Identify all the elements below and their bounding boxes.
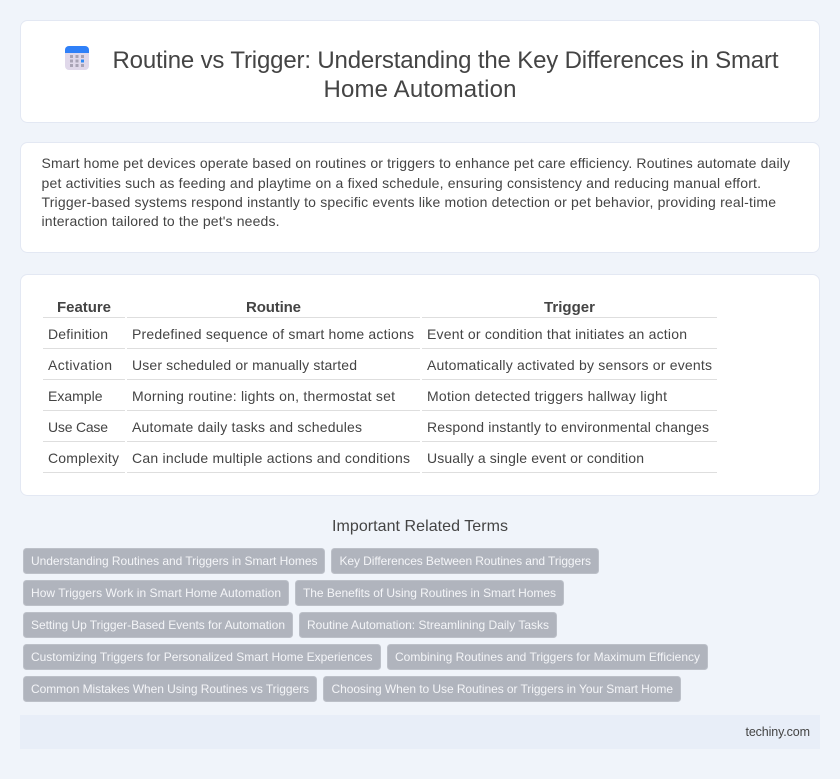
- chip: benefits of routines: [296, 580, 564, 606]
- chip: how triggers work: How Triggers Work in Smart Home Automation: [31, 586, 281, 600]
- chip: common mistakes: Common Mistakes When Using Routines vs Triggers: [31, 682, 309, 696]
- chip: combining routines and triggers: [388, 644, 708, 670]
- chip: understanding routines and triggers: Understanding Routines and Triggers in Smart Homes: [31, 554, 318, 568]
- title: Home Automation: [324, 76, 516, 103]
- table row: complexity: Complexity: [48, 450, 119, 466]
- table row: complexity: Usually a single event or condition: [427, 450, 644, 466]
- table row: use case: Use Case: [48, 419, 108, 435]
- table row: activation: Activation: [48, 357, 112, 373]
- table row: use case: [48, 419, 709, 435]
- text block: summary: Smart home pet devices operate based on routines or triggers to enhance pet care efficiency. Routines automate daily: [42, 155, 790, 171]
- table row: example: [48, 388, 667, 404]
- table row: definition: [48, 326, 687, 342]
- text block: summary: pet activities such as feeding and playtime on a fixed schedule, ensuring consistency and reducing manual effort.: [42, 175, 761, 191]
- footer source text: techiny.com: [746, 725, 810, 739]
- chip: understanding routines and triggers: [24, 548, 324, 574]
- table row: use case: Automate daily tasks and schedules: [132, 419, 362, 435]
- table header: Trigger: [544, 299, 595, 316]
- table row: example: Example: [48, 388, 103, 404]
- chip: common mistakes: [24, 676, 316, 702]
- table row: example: Morning routine: lights on, thermostat set: [132, 388, 395, 404]
- chip: customizing triggers: Customizing Triggers for Personalized Smart Home Experiences: [31, 650, 372, 664]
- table row: example: Motion detected triggers hallway light: [427, 388, 667, 404]
- table row: activation: Automatically activated by sensors or events: [427, 357, 712, 373]
- chip: choosing when to use: [324, 676, 680, 702]
- chip: key differences: Key Differences Between Routines and Triggers: [340, 554, 591, 568]
- chip: benefits of routines: The Benefits of Using Routines in Smart Homes: [303, 586, 556, 600]
- chip: combining routines and triggers: Combining Routines and Triggers for Maximum Efficiency: [395, 650, 700, 664]
- related term chips: [24, 548, 708, 702]
- table row: definition: Predefined sequence of smart home actions: [132, 326, 414, 342]
- table row: use case: Respond instantly to environmental changes: [427, 419, 709, 435]
- table header: Routine: [246, 299, 301, 316]
- table row: complexity: [48, 450, 644, 466]
- table row: definition: Definition: [48, 326, 108, 342]
- table header: Feature: [57, 299, 111, 316]
- panel: title card: [20, 20, 820, 122]
- chip: choosing when to use: Choosing When to Use Routines or Triggers in Your Smart Home: [332, 682, 673, 696]
- table header: [57, 299, 595, 316]
- chip: key differences: [332, 548, 598, 574]
- text block: summary: [42, 155, 790, 229]
- text block: summary: Trigger-based systems respond instantly to specific events like motion detection or pet behavior, providing real-time: [42, 194, 776, 210]
- chip: routine automation: Routine Automation: Streamlining Daily Tasks: [307, 618, 549, 632]
- title: [112, 47, 779, 103]
- chip: how triggers work: [24, 580, 288, 606]
- title: Routine vs Trigger: Understanding the Key Differences in Smart: [112, 47, 779, 74]
- footer bar: [20, 715, 820, 749]
- table row: definition: Event or condition that initiates an action: [427, 326, 687, 342]
- icon: calendar: [65, 46, 89, 70]
- text block: summary: interaction tailored to the pet's needs.: [42, 213, 280, 229]
- chip: routine automation: [300, 612, 556, 638]
- panel: comparison table: [20, 274, 820, 496]
- heading: important related terms: Important Related Terms: [332, 518, 508, 535]
- chip: setting up trigger-based events: [24, 612, 292, 638]
- chip: setting up trigger-based events: Setting Up Trigger-Based Events for Automation: [31, 618, 285, 632]
- table row: complexity: Can include multiple actions and conditions: [132, 450, 410, 466]
- panel: summary paragraph: [20, 142, 820, 252]
- table row: activation: User scheduled or manually started: [132, 357, 357, 373]
- chip: customizing triggers: [24, 644, 380, 670]
- table row: activation: [48, 357, 712, 373]
